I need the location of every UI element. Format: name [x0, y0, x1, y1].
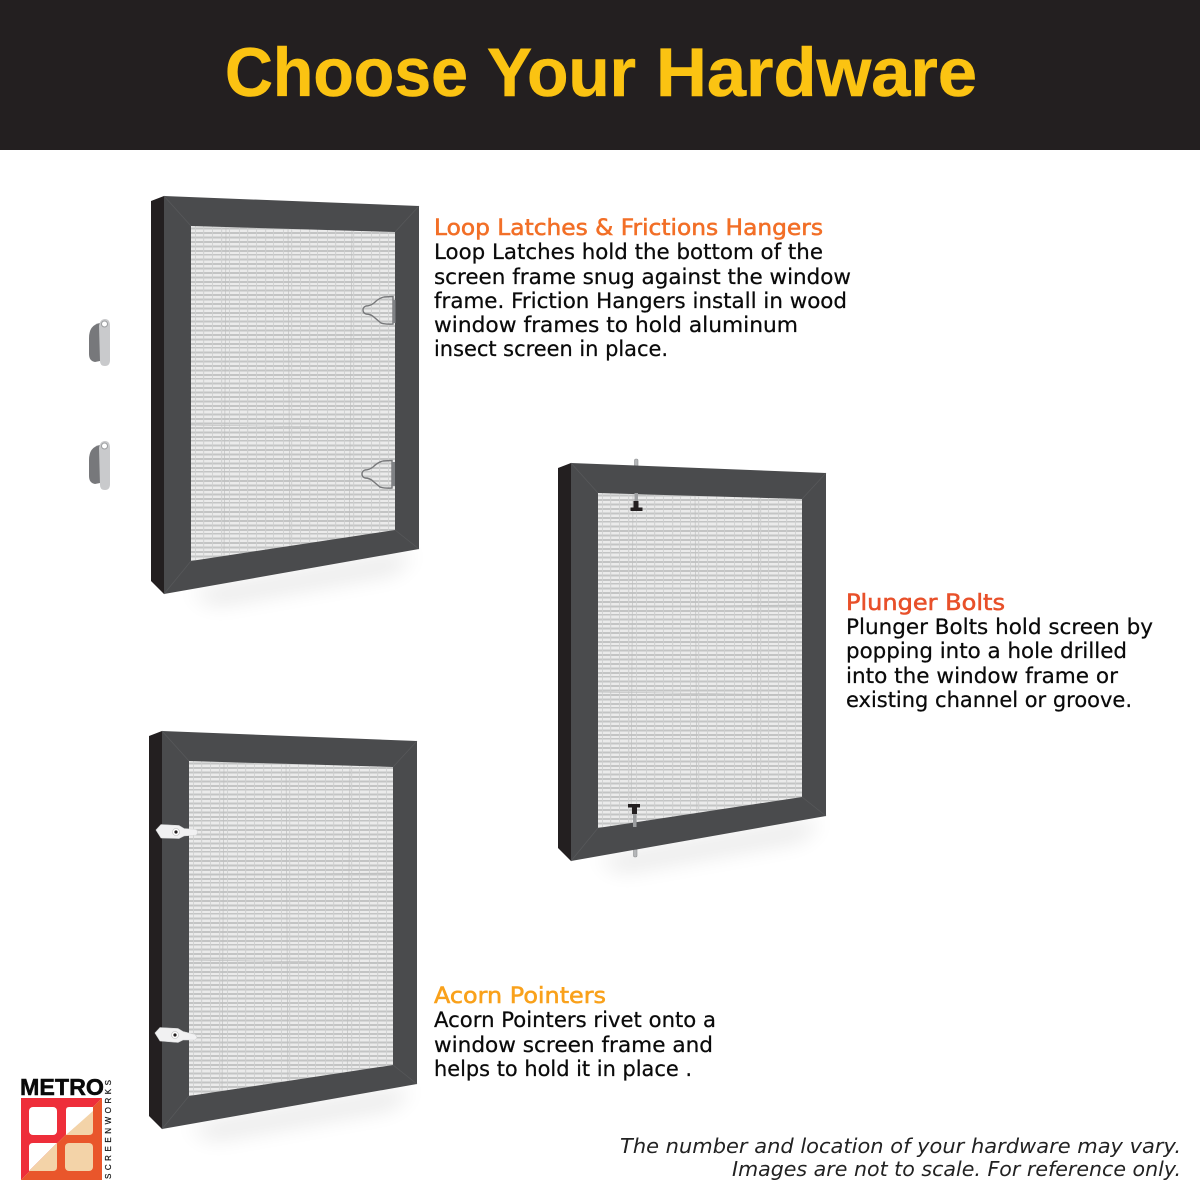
panel: loop latches screen	[151, 196, 419, 604]
text block: loop latches: screen frame snug against the window	[434, 265, 851, 290]
text block: plunger bolts: existing channel or groove.	[846, 688, 1132, 713]
text block: loop latches: Loop Latches hold the bottom of the	[434, 240, 823, 265]
text block: plunger bolts	[846, 591, 1153, 713]
title: Choose	[225, 34, 468, 111]
footnote: The number and location of your hardware may vary.	[620, 1134, 1181, 1158]
text block: loop latches: Loop Latches & Frictions Hangers	[434, 216, 823, 241]
icon: loop latch top	[89, 319, 110, 366]
title: Your	[487, 34, 636, 111]
text block: acorn pointers: window screen frame and	[434, 1033, 713, 1058]
text block: plunger bolts: Plunger Bolts hold screen by	[846, 615, 1153, 640]
text block: loop latches: frame. Friction Hangers install in wood	[434, 289, 847, 314]
logo: Metro Screenworks: METRO	[20, 1074, 104, 1100]
text block: plunger bolts: into the window frame or	[846, 664, 1118, 689]
icon: plunger pin ends outside frame	[634, 459, 638, 857]
panel: acorn pointers screen	[149, 731, 417, 1139]
text block: plunger bolts: popping into a hole drilled	[846, 639, 1127, 664]
icon: loop latch bottom	[89, 441, 110, 490]
icon: acorn pointer top	[156, 824, 198, 838]
footnote	[620, 1134, 1181, 1181]
icon: plunger bolt top	[630, 493, 642, 511]
text block: plunger bolts: Plunger Bolts	[846, 591, 1005, 616]
text block: loop latches: window frames to hold aluminum	[434, 313, 798, 338]
icon: friction hanger top	[363, 296, 396, 324]
title: Hardware	[656, 34, 977, 111]
logo: Metro Screenworks: SCREENWORKS	[104, 1080, 113, 1179]
icon: friction hanger bottom	[362, 460, 395, 488]
header band	[0, 0, 1200, 150]
text block: acorn pointers: Acorn Pointers rivet onto a	[434, 1008, 716, 1033]
logo: Metro Screenworks	[20, 1074, 113, 1180]
text block: acorn pointers: helps to hold it in place .	[434, 1057, 692, 1082]
text block: loop latches: insect screen in place.	[434, 337, 668, 362]
footnote: Images are not to scale. For reference only.	[732, 1157, 1181, 1181]
text block: acorn pointers: Acorn Pointers	[434, 984, 606, 1009]
panel: plunger bolts screen	[558, 459, 826, 871]
text block: loop latches	[434, 216, 851, 362]
icon: acorn pointer bottom	[155, 1028, 197, 1042]
icon: plunger bolt bottom	[628, 804, 640, 827]
text block: acorn pointers	[434, 984, 716, 1082]
